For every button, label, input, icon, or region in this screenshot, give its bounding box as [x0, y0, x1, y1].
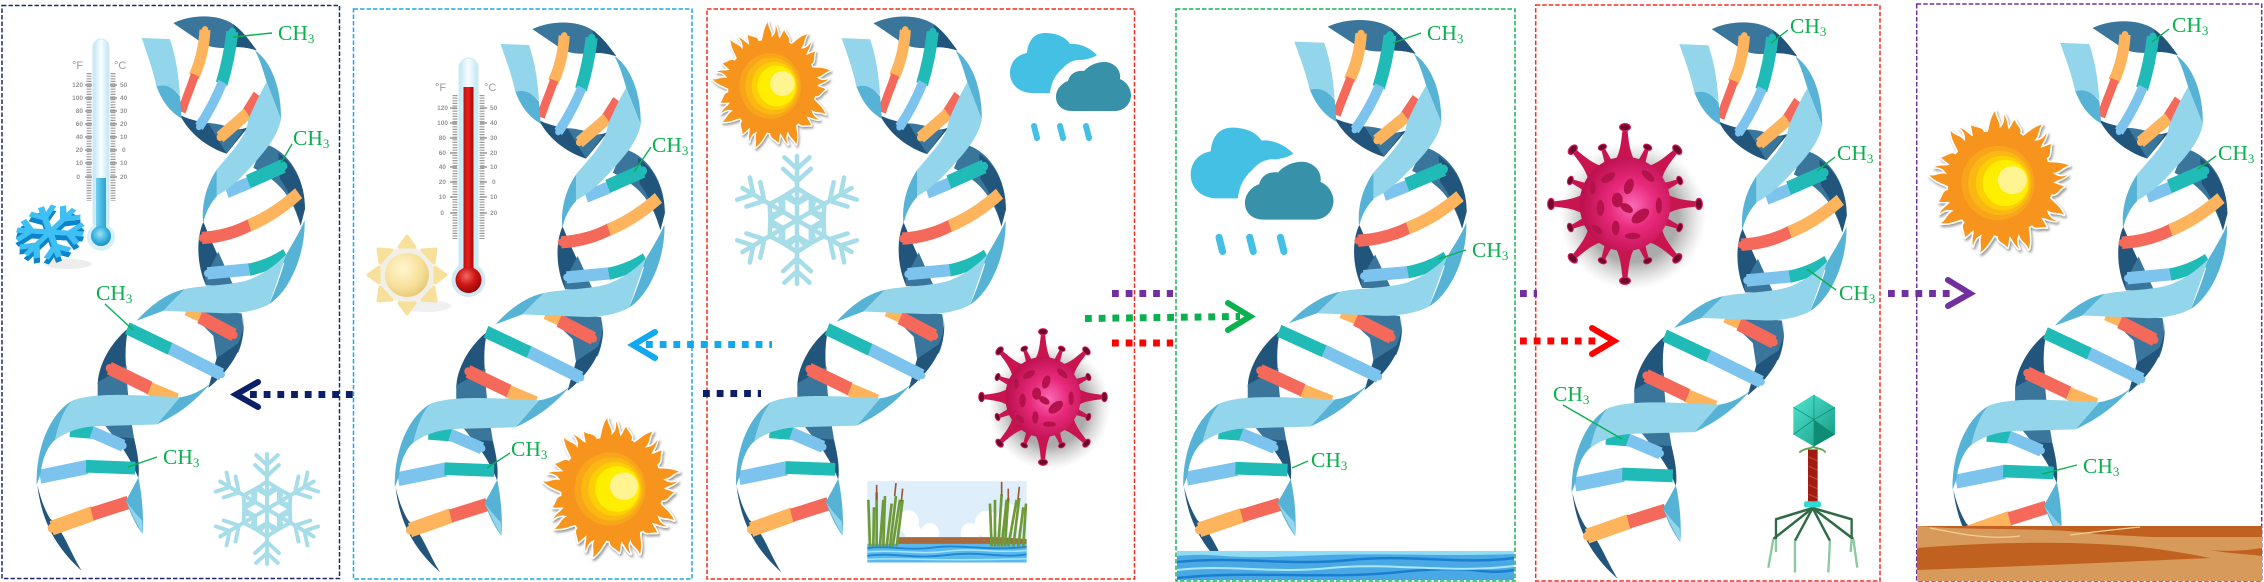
icon: bacteriophage	[1768, 395, 1857, 573]
icon: thermometer hot: °C	[484, 82, 496, 94]
icon: thermometer hot: 20	[439, 179, 446, 186]
icon: thermometer cold: 40	[120, 95, 128, 102]
icon: thermometer cold: 120	[72, 82, 83, 89]
label: CH3 top	[1771, 14, 1826, 43]
label: CH3 lower: CH	[1553, 382, 1583, 406]
icon: thermometer cold: 80	[76, 108, 83, 115]
ground band	[1917, 526, 2262, 581]
label: CH3 bottom	[2042, 454, 2119, 479]
panel: pathogen stress	[1536, 5, 1880, 581]
label: CH3 lower: CH	[511, 437, 541, 461]
icon: thermometer cold: 20	[120, 121, 128, 128]
icon: thermometer hot: °F	[435, 82, 446, 94]
label: CH3 middle	[1807, 269, 1875, 306]
DNA helix	[1953, 21, 2227, 576]
icon: thermometer hot: 100	[437, 120, 448, 127]
label: CH3 upper: 3	[682, 143, 688, 158]
label: CH3 bottom: 3	[193, 455, 199, 470]
icon: thermometer hot: 30	[490, 135, 498, 142]
panel: cold stress	[2, 6, 340, 578]
icon: thermometer cold: 40	[76, 134, 83, 141]
label: CH3 upper	[634, 133, 688, 172]
icon: virus	[1548, 124, 1706, 290]
label: CH3 top: 3	[1820, 24, 1826, 39]
icon: thermometer cold: 100	[72, 95, 83, 102]
icon: thermometer cold: 0	[122, 147, 126, 154]
icon: thermometer cold: 0	[76, 174, 80, 181]
label: CH3 bottom	[1292, 448, 1347, 473]
icon: thermometer hot: 10	[490, 194, 498, 201]
label: CH3 top: CH	[278, 21, 308, 45]
icon: thermometer cold: 60	[76, 121, 83, 128]
label: CH3 middle	[1438, 238, 1508, 263]
label: CH3 bottom: 3	[2113, 464, 2119, 479]
label: CH3 upper	[2198, 141, 2254, 169]
label: CH3 bottom: CH	[163, 445, 193, 469]
label: CH3 lower middle	[96, 281, 133, 330]
label: CH3 upper: CH	[2218, 141, 2248, 165]
icon: thermometer cold: °C	[114, 60, 126, 72]
label: CH3 upper middle: 3	[323, 136, 329, 151]
panel: water stress	[1176, 9, 1515, 581]
icon: thermometer cold: 30	[120, 108, 128, 115]
label: CH3 lower	[487, 437, 547, 468]
DNA helix	[1572, 22, 1847, 579]
panel: heat stress	[354, 9, 692, 579]
label: CH3 top	[233, 21, 314, 46]
icon: orange sun	[1928, 111, 2072, 256]
label: CH3 middle: CH	[1839, 281, 1869, 305]
icon: thermometer hot: 20	[490, 210, 498, 217]
icon: orange sun	[542, 418, 682, 561]
icon: thermometer hot: 10	[439, 194, 446, 201]
label: CH3 upper middle: CH	[293, 126, 323, 150]
icon: thermometer hot: 40	[490, 120, 498, 127]
icon: virus	[979, 329, 1110, 470]
label: CH3 upper middle	[281, 126, 329, 163]
label: CH3 top: 3	[2202, 23, 2208, 38]
image: pond scene	[867, 481, 1027, 562]
arrow: green, pointing to water panel	[1085, 303, 1250, 330]
arrow: purple, pointing to drought panel	[1112, 280, 1970, 306]
icon: thermometer hot: 120	[437, 105, 448, 112]
icon: blue 3D snowflake	[11, 198, 92, 271]
icon: rain clouds	[1191, 128, 1333, 252]
label: CH3 top: CH	[1427, 21, 1457, 45]
icon: thermometer cold: 10	[76, 160, 83, 167]
icon: thermometer hot: 0	[440, 210, 444, 217]
label: CH3 lower	[1553, 382, 1622, 439]
label: CH3 upper: CH	[1837, 141, 1867, 165]
icon: thermometer hot: 80	[439, 135, 446, 142]
label: CH3 top: 3	[1457, 31, 1463, 46]
DNA helix	[395, 22, 665, 572]
label: CH3 top: CH	[2172, 13, 2202, 37]
label: CH3 middle: CH	[1472, 238, 1502, 262]
label: CH3 top: 3	[308, 31, 314, 46]
label: CH3 lower middle: CH	[96, 281, 126, 305]
icon: thermometer cold	[72, 39, 128, 251]
icon: thermometer hot	[435, 58, 498, 297]
label: CH3 lower middle: 3	[126, 291, 132, 306]
label: CH3 upper: CH	[652, 133, 682, 157]
label: CH3 middle: 3	[1869, 291, 1875, 306]
label: CH3 bottom: CH	[2083, 454, 2113, 478]
panel: drought stress	[1917, 4, 2262, 581]
label: CH3 bottom	[128, 445, 199, 470]
label: CH3 middle: 3	[1502, 248, 1508, 263]
DNA helix	[1183, 20, 1467, 572]
label: CH3 upper: 3	[1867, 151, 1873, 166]
icon: thermometer cold: 20	[120, 174, 128, 181]
label: CH3 lower: 3	[1583, 392, 1589, 407]
icon: thermometer hot: 40	[439, 164, 446, 171]
icon: thermometer cold: 10	[120, 134, 128, 141]
water band	[1177, 551, 1514, 580]
icon: pale sun	[368, 236, 451, 314]
DNA helix	[736, 16, 1006, 572]
arrow: red, pointing to pathogen panel	[1112, 328, 1614, 354]
label: CH3 upper	[1817, 141, 1873, 171]
icon: thermometer hot: 10	[490, 164, 498, 171]
label: CH3 bottom: 3	[1341, 458, 1347, 473]
icon: thermometer cold: 20	[76, 147, 83, 154]
label: CH3 upper: 3	[2248, 151, 2254, 166]
icon: thermometer hot: 60	[439, 150, 446, 157]
label: CH3 top	[2152, 13, 2208, 42]
icon: pale snowflake	[214, 454, 320, 564]
label: CH3 top: CH	[1790, 14, 1820, 38]
icon: pale snowflake	[736, 156, 858, 284]
icon: thermometer hot: 0	[492, 179, 496, 186]
panel: combined stresses	[707, 9, 1134, 579]
icon: thermometer cold: 50	[120, 82, 128, 89]
icon: thermometer hot: 20	[490, 150, 498, 157]
DNA helix	[37, 16, 305, 571]
icon: thermometer cold: 10	[120, 160, 128, 167]
label: CH3 lower: 3	[541, 447, 547, 462]
icon: thermometer hot: 50	[490, 105, 498, 112]
arrow: navy, pointing to cold panel	[236, 382, 761, 407]
label: CH3 bottom: CH	[1311, 448, 1341, 472]
icon: rain clouds	[1010, 33, 1131, 138]
arrow: light blue, pointing to heat panel	[633, 332, 772, 358]
icon: thermometer cold: °F	[72, 60, 83, 72]
icon: orange sun	[711, 22, 833, 150]
label: CH3 top	[1393, 21, 1463, 46]
